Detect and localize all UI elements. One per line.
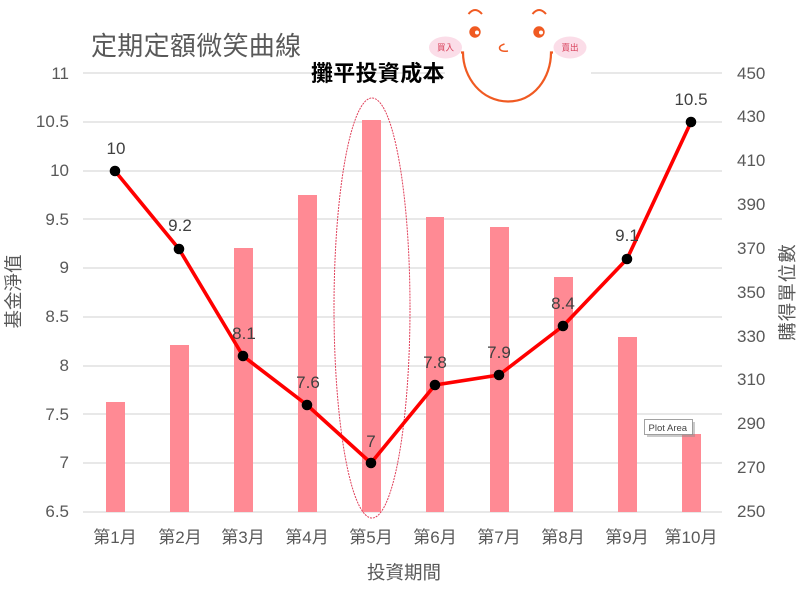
right axis labels: units purchased: 410 — [737, 151, 765, 170]
left axis labels: fund NAV — [36, 64, 69, 521]
right axis labels: units purchased: 430 — [737, 107, 765, 126]
icon: smiling face with buy and sell cheeks — [429, 10, 586, 102]
left axis labels: fund NAV: 7.5 — [45, 405, 69, 424]
face background mask — [445, 60, 591, 86]
nose — [500, 44, 508, 51]
data labels: 7 — [366, 432, 376, 451]
right axis labels: units purchased: 450 — [737, 64, 765, 83]
right eyebrow — [532, 10, 546, 14]
buy cheek: 買入 — [437, 42, 454, 52]
line series: fund NAV — [115, 122, 691, 463]
data labels: 7.9 — [487, 343, 511, 362]
sell cheek — [554, 36, 586, 58]
x axis labels: months: 第3月 — [221, 528, 265, 547]
sell cheek: 賣出 — [561, 42, 579, 52]
x axis title: 投資期間 — [367, 562, 441, 583]
left eyebrow — [468, 10, 482, 14]
data labels: 10 — [107, 139, 125, 158]
left axis labels: fund NAV: 10 — [50, 161, 69, 180]
data labels: 9.2 — [168, 216, 192, 235]
data labels: 8.1 — [232, 324, 256, 343]
right axis labels: units purchased: 310 — [737, 370, 765, 389]
right axis labels: units purchased: 270 — [737, 458, 765, 477]
right eye — [533, 26, 545, 38]
x axis labels: months: 第2月 — [158, 528, 202, 547]
tooltip: Plot Area: Plot Area — [648, 423, 688, 434]
left axis labels: fund NAV: 8.5 — [45, 307, 69, 326]
left axis labels: fund NAV: 6.5 — [45, 502, 69, 521]
x axis labels: months: 第1月 — [93, 528, 137, 547]
x axis labels: months: 第9月 — [605, 528, 649, 547]
x axis labels: months: 第6月 — [413, 528, 457, 547]
x axis labels: months: 第7月 — [477, 528, 521, 547]
x axis labels: months: 第8月 — [541, 528, 585, 547]
left axis title: 基金淨值 — [3, 254, 24, 329]
right axis labels: units purchased: 390 — [737, 195, 765, 214]
left axis labels: fund NAV: 11 — [51, 64, 69, 83]
highlight ellipse around month 5 — [334, 98, 410, 518]
data labels: 7.8 — [423, 353, 447, 372]
right axis labels: units purchased: 250 — [737, 502, 765, 521]
callout: smoothing the average cost: 攤平投資成本 — [311, 61, 445, 86]
data labels: 10.5 — [674, 90, 708, 109]
right axis labels: units purchased: 330 — [737, 327, 765, 346]
data labels: 7.6 — [296, 373, 320, 392]
x axis labels: months — [93, 528, 717, 547]
chart title: 定期定額微笑曲線 — [91, 31, 301, 61]
data labels: 9.1 — [615, 226, 639, 245]
x axis labels: months: 第5月 — [349, 528, 393, 547]
right axis labels: units purchased — [737, 64, 765, 521]
data labels — [107, 90, 708, 451]
bar series: units purchased — [106, 120, 701, 512]
left eye — [469, 26, 481, 38]
right axis labels: units purchased: 350 — [737, 283, 765, 302]
data labels: 8.4 — [551, 294, 575, 313]
x axis labels: months: 第4月 — [285, 528, 329, 547]
left axis labels: fund NAV: 9.5 — [45, 210, 69, 229]
left axis labels: fund NAV: 9 — [60, 258, 69, 277]
left axis labels: fund NAV: 8 — [60, 356, 69, 375]
right axis labels: units purchased: 290 — [737, 414, 765, 433]
tooltip: Plot Area — [644, 420, 695, 437]
right axis title: 購得單位數 — [777, 243, 798, 341]
left axis labels: fund NAV: 7 — [60, 453, 69, 472]
buy cheek — [429, 36, 462, 58]
x axis labels: months: 第10月 — [665, 528, 717, 547]
mouth — [461, 52, 553, 102]
right axis labels: units purchased: 370 — [737, 239, 765, 258]
left axis labels: fund NAV: 10.5 — [36, 112, 69, 131]
line markers — [110, 117, 696, 468]
